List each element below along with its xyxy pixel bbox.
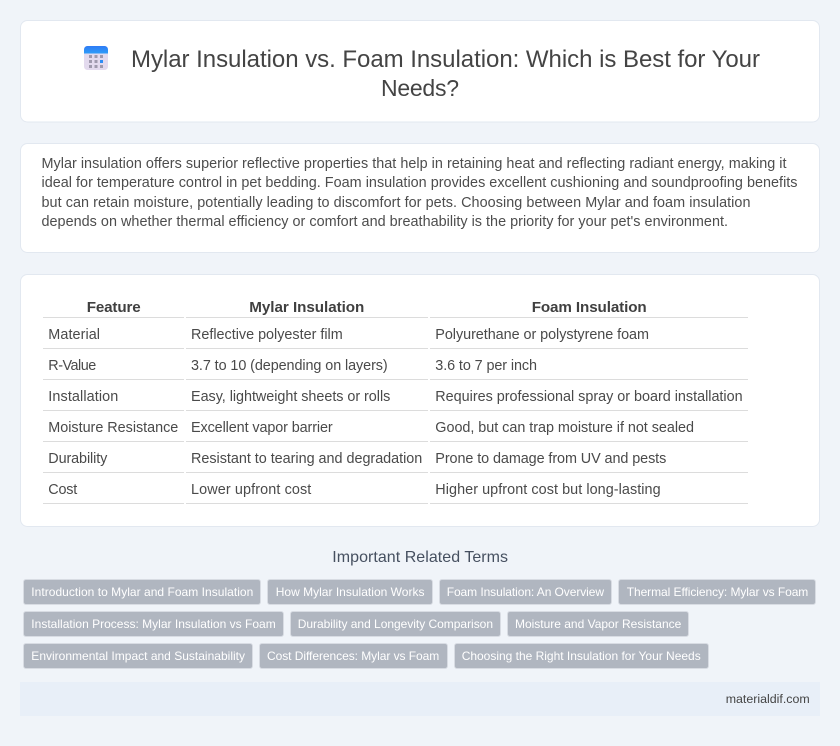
table row: installation: Requires professional spray or board installation	[435, 389, 743, 405]
chip: installation process: Installation Process: Mylar Insulation vs Foam	[31, 617, 276, 631]
table row: moisture resistance	[48, 420, 694, 436]
text block: summary: depends on whether thermal efficiency or comfort and breathability is the priority for your pet's environment.	[42, 214, 728, 230]
table row: cost: Higher upfront cost but long-lasting	[435, 482, 661, 498]
footer	[20, 682, 820, 716]
title: Mylar Insulation vs. Foam Insulation: Which is Best for Your	[131, 46, 760, 73]
chip: introduction: Introduction to Mylar and Foam Insulation	[31, 585, 253, 599]
text block: summary	[42, 156, 798, 230]
chip: durability: Durability and Longevity Comparison	[298, 617, 493, 631]
title: Needs?	[381, 75, 459, 101]
table row: installation: Easy, lightweight sheets or rolls	[191, 389, 390, 405]
chip: introduction	[24, 580, 260, 604]
table row: installation	[48, 389, 743, 405]
table row: cost: Lower upfront cost	[191, 482, 311, 498]
table row: moisture resistance: Excellent vapor barrier	[191, 420, 333, 436]
table row: moisture resistance: Good, but can trap moisture if not sealed	[435, 420, 694, 436]
text block: summary: ideal for temperature control in pet bedding. Foam insulation provides excellent cushioning and soundproofing benefits	[42, 175, 798, 191]
table row: cost: Cost	[48, 482, 77, 498]
table row: durability: Durability	[48, 451, 108, 467]
table header	[87, 299, 647, 316]
chip: foam overview: Foam Insulation: An Overview	[447, 585, 604, 599]
table row: cost	[48, 482, 661, 498]
table header: Mylar Insulation	[249, 299, 364, 316]
text block: summary: but can retain moisture, potentially leading to discomfort for pets. Choosing between Mylar and foam insulation	[42, 195, 750, 211]
chip: environmental impact: Environmental Impact and Sustainability	[31, 649, 245, 663]
chip: thermal efficiency: Thermal Efficiency: Mylar vs Foam	[627, 585, 808, 599]
icon: calendar	[84, 46, 108, 70]
chip: durability	[290, 612, 500, 636]
table row: r-value: R-Value	[48, 358, 96, 374]
panel: comparison table	[20, 274, 820, 526]
table row: material: Material	[48, 327, 100, 343]
table row: durability: Prone to damage from UV and pests	[435, 451, 666, 467]
heading: related terms: Important Related Terms	[332, 549, 508, 566]
table header: Foam Insulation	[532, 299, 647, 316]
chip: cost differences	[260, 644, 448, 668]
panel: related term chips	[24, 580, 816, 668]
chip: how mylar works	[268, 580, 432, 604]
chip: installation process	[24, 612, 284, 636]
chip: thermal efficiency	[618, 580, 816, 604]
panel: summary paragraph	[20, 144, 820, 252]
table row: material: Reflective polyester film	[191, 327, 343, 343]
table row: r-value	[48, 358, 537, 374]
chip: environmental impact	[24, 644, 252, 668]
chip: how mylar works: How Mylar Insulation Works	[276, 585, 424, 599]
chip: choosing insulation: Choosing the Right Insulation for Your Needs	[462, 649, 701, 663]
chip: choosing insulation	[454, 644, 708, 668]
chip: moisture	[508, 612, 688, 636]
footer source text: materialdif.com	[726, 692, 810, 706]
table row: moisture resistance: Moisture Resistance	[48, 420, 178, 436]
text block: summary: Mylar insulation offers superior reflective properties that help in retaining heat and reflecting radiant energy, making it	[42, 156, 786, 172]
table row: installation: Installation	[48, 389, 118, 405]
table row: durability: Resistant to tearing and degradation	[191, 451, 422, 467]
table row: r-value: 3.6 to 7 per inch	[435, 358, 537, 374]
table row: r-value: 3.7 to 10 (depending on layers)	[191, 358, 388, 374]
table row: material	[48, 327, 649, 343]
chip: foam overview	[440, 580, 612, 604]
chip: moisture: Moisture and Vapor Resistance	[515, 617, 682, 631]
table header: Feature	[87, 299, 141, 316]
table row: durability	[48, 451, 666, 467]
chip: cost differences: Cost Differences: Mylar vs Foam	[267, 649, 439, 663]
panel: title header	[20, 20, 820, 122]
table row: material: Polyurethane or polystyrene foam	[435, 327, 649, 343]
